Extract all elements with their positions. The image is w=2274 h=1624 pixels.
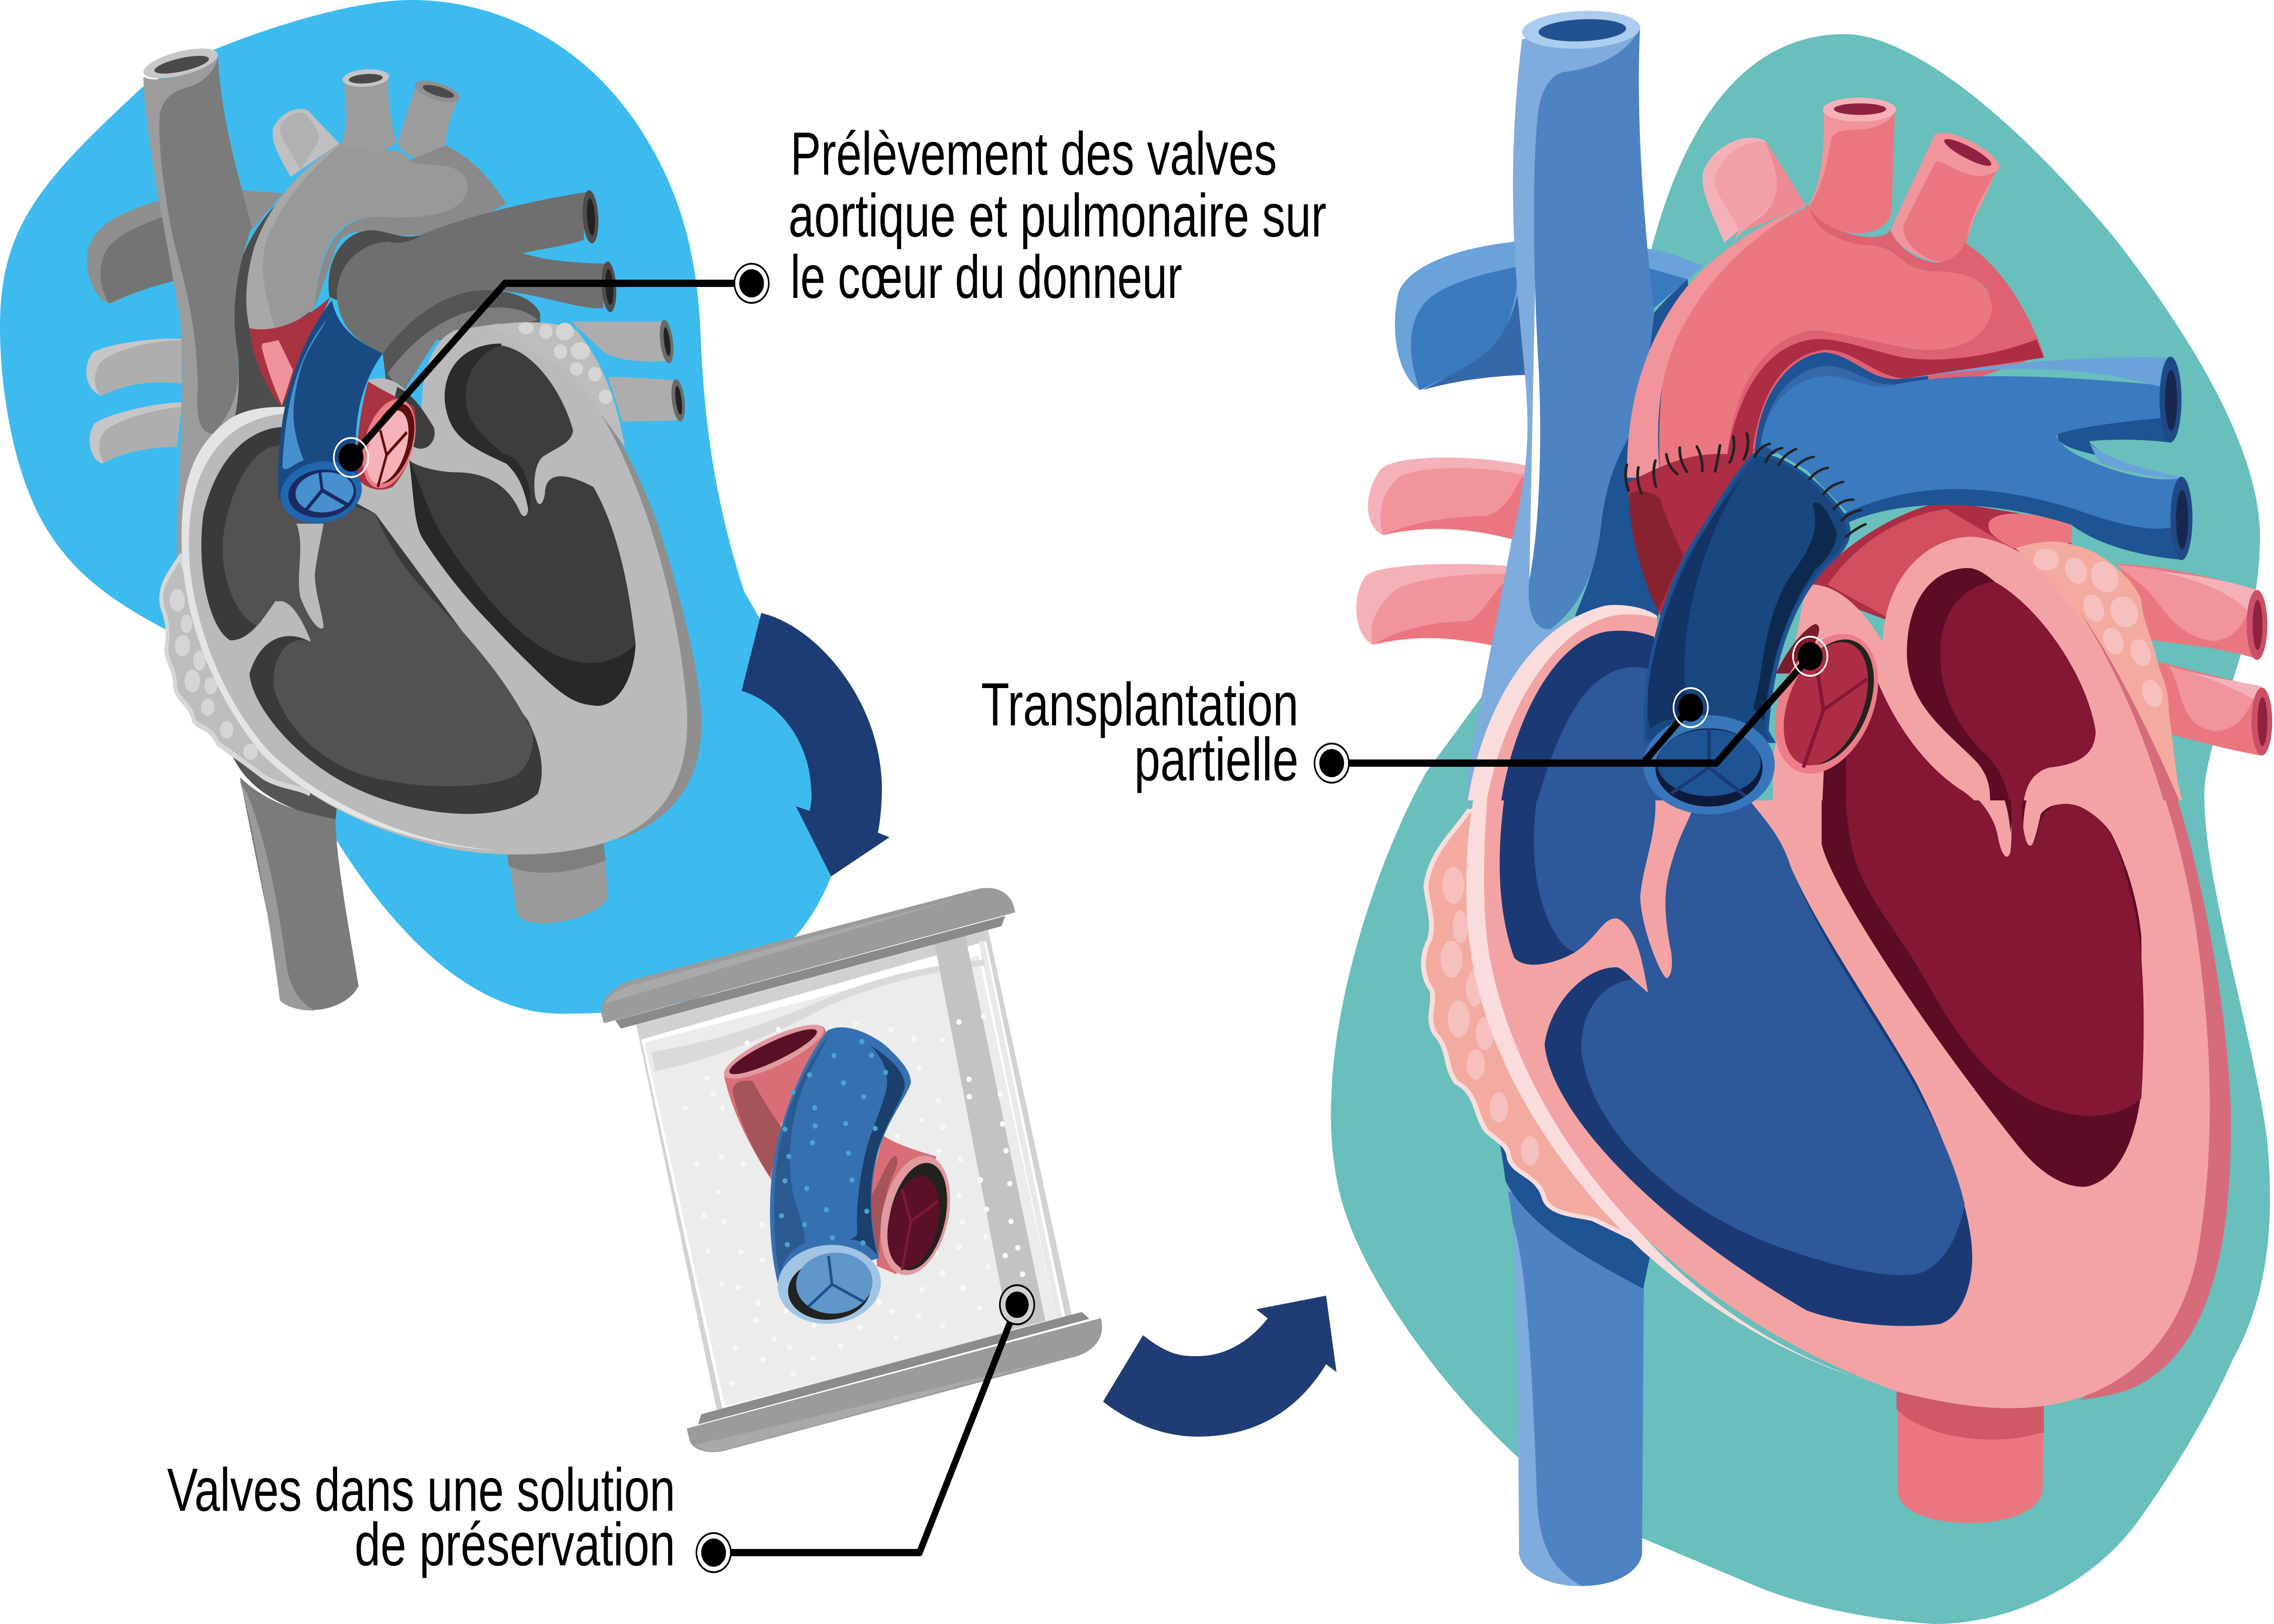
heart wall recipient	[1484, 773, 2210, 1408]
heart outer shadow	[533, 333, 701, 839]
inferior vena cava recipient	[1469, 773, 1651, 1586]
target on recipient aortic side	[1674, 688, 1708, 727]
right pink vein upper	[2117, 564, 2267, 660]
label: partial transplant: Transplantation	[981, 670, 1298, 739]
superior vena cava recipient	[1465, 8, 1654, 819]
target at transplant label	[1314, 744, 1349, 783]
teal background blob	[1331, 34, 2270, 1624]
back dark blue atrium	[1575, 279, 1697, 621]
jar glass body	[636, 929, 1072, 1412]
jar top cap	[601, 888, 1017, 1029]
top fat tissue	[489, 322, 625, 447]
label: donor valve harvesting: Prélèvement des valves	[790, 120, 1277, 188]
target at donor label	[735, 264, 769, 303]
left atrium upper recipient	[1821, 568, 2102, 819]
target in jar	[1000, 1285, 1034, 1324]
left ventricle recipient	[1821, 773, 2143, 1187]
donor valve ring	[279, 457, 364, 528]
target on recipient pulmonary side	[1793, 637, 1827, 676]
arrow: jar to recipient	[1103, 1296, 1337, 1437]
descending aorta stub	[506, 837, 608, 923]
heart wall upper recipient	[1465, 537, 2187, 819]
label: partial transplant	[981, 670, 1298, 794]
preservation jar	[601, 888, 1102, 1452]
right pink vein lower	[2158, 662, 2272, 755]
right chambers	[201, 427, 542, 814]
arrow: donor to jar	[742, 613, 890, 876]
blue vessel in jar	[770, 1027, 911, 1291]
pulmonary artery	[328, 189, 618, 353]
label: preservation solution: de préservation	[355, 1510, 675, 1579]
back vein band	[242, 190, 283, 230]
preservation solution bubbles	[685, 1016, 1022, 1384]
heart outer shadow recipient	[2080, 773, 2231, 1400]
jar bottom cap	[687, 1312, 1102, 1452]
back shading behind aorta	[218, 197, 310, 440]
donor heart (grey)	[86, 42, 701, 1011]
descending aorta recipient	[1897, 1386, 2044, 1523]
transplanted valves on recipient	[1625, 433, 1897, 815]
label: partial transplant: partielle	[1134, 725, 1298, 794]
red aorta section	[250, 297, 330, 407]
label: donor valve harvesting	[788, 120, 1327, 311]
inferior vena cava	[230, 747, 358, 1011]
target at jar label	[696, 1533, 731, 1572]
label: donor valve harvesting: aortique et pulmonaire sur	[788, 181, 1327, 250]
aortic branches recipient	[1702, 98, 2006, 264]
arcs under pulmonary artery	[382, 290, 540, 393]
sutures	[1625, 433, 1866, 537]
left fat tissue	[161, 557, 310, 794]
superior vena cava	[142, 42, 252, 560]
dome under pulmonary artery	[1806, 501, 2071, 627]
heart shadow rim upper	[2078, 608, 2187, 819]
aortic valve ring on recipient	[1643, 715, 1775, 815]
left chambers	[387, 343, 635, 706]
right pulmonary veins	[572, 318, 687, 423]
pulmonary vein lower left	[90, 402, 181, 463]
recipient heart	[1356, 8, 2272, 1586]
transplanted blue tube	[278, 300, 382, 518]
pink vessel right	[870, 1135, 961, 1283]
heart light rim	[181, 407, 499, 850]
leader: donor valves	[334, 264, 769, 477]
left pink vein upper	[1368, 458, 1526, 543]
pulmonary root red	[352, 382, 427, 501]
recipient heart lower part	[1424, 773, 2231, 1586]
heart pale rim recipient	[1466, 773, 1867, 1381]
leader: jar	[696, 1285, 1034, 1572]
jar valve ring	[775, 1241, 883, 1327]
left upper blue vein	[1395, 241, 1703, 390]
label: preservation solution: Valves dans une solution	[167, 1456, 675, 1524]
aortic arch	[247, 143, 506, 330]
label: preservation solution	[167, 1456, 675, 1579]
left fat tissue recipient	[1424, 811, 1636, 1240]
pulmonary artery recipient	[1755, 352, 2193, 560]
pulmonary vein upper left	[87, 199, 177, 303]
blue background blob	[0, 0, 840, 1014]
recipient aorta cut section	[1627, 449, 1755, 616]
heart wall	[181, 323, 687, 855]
aortic branches	[272, 68, 461, 177]
donor tube on recipient	[1645, 454, 1849, 741]
right ventricle recipient	[1499, 773, 1972, 1326]
recipient heart upper part	[1356, 8, 2272, 819]
top right fat tissue	[2015, 542, 2187, 819]
leader: recipient valves	[1314, 637, 1827, 783]
pink vessel upper left	[719, 1015, 829, 1181]
aortic arch recipient	[1627, 206, 2044, 480]
left pink vein lower	[1356, 564, 1514, 648]
pulmonary vein middle left	[86, 339, 181, 396]
label: donor valve harvesting: le cœur du donneur	[790, 243, 1182, 311]
target on donor valve	[334, 438, 368, 477]
pulmonary root on recipient	[1756, 623, 1897, 784]
